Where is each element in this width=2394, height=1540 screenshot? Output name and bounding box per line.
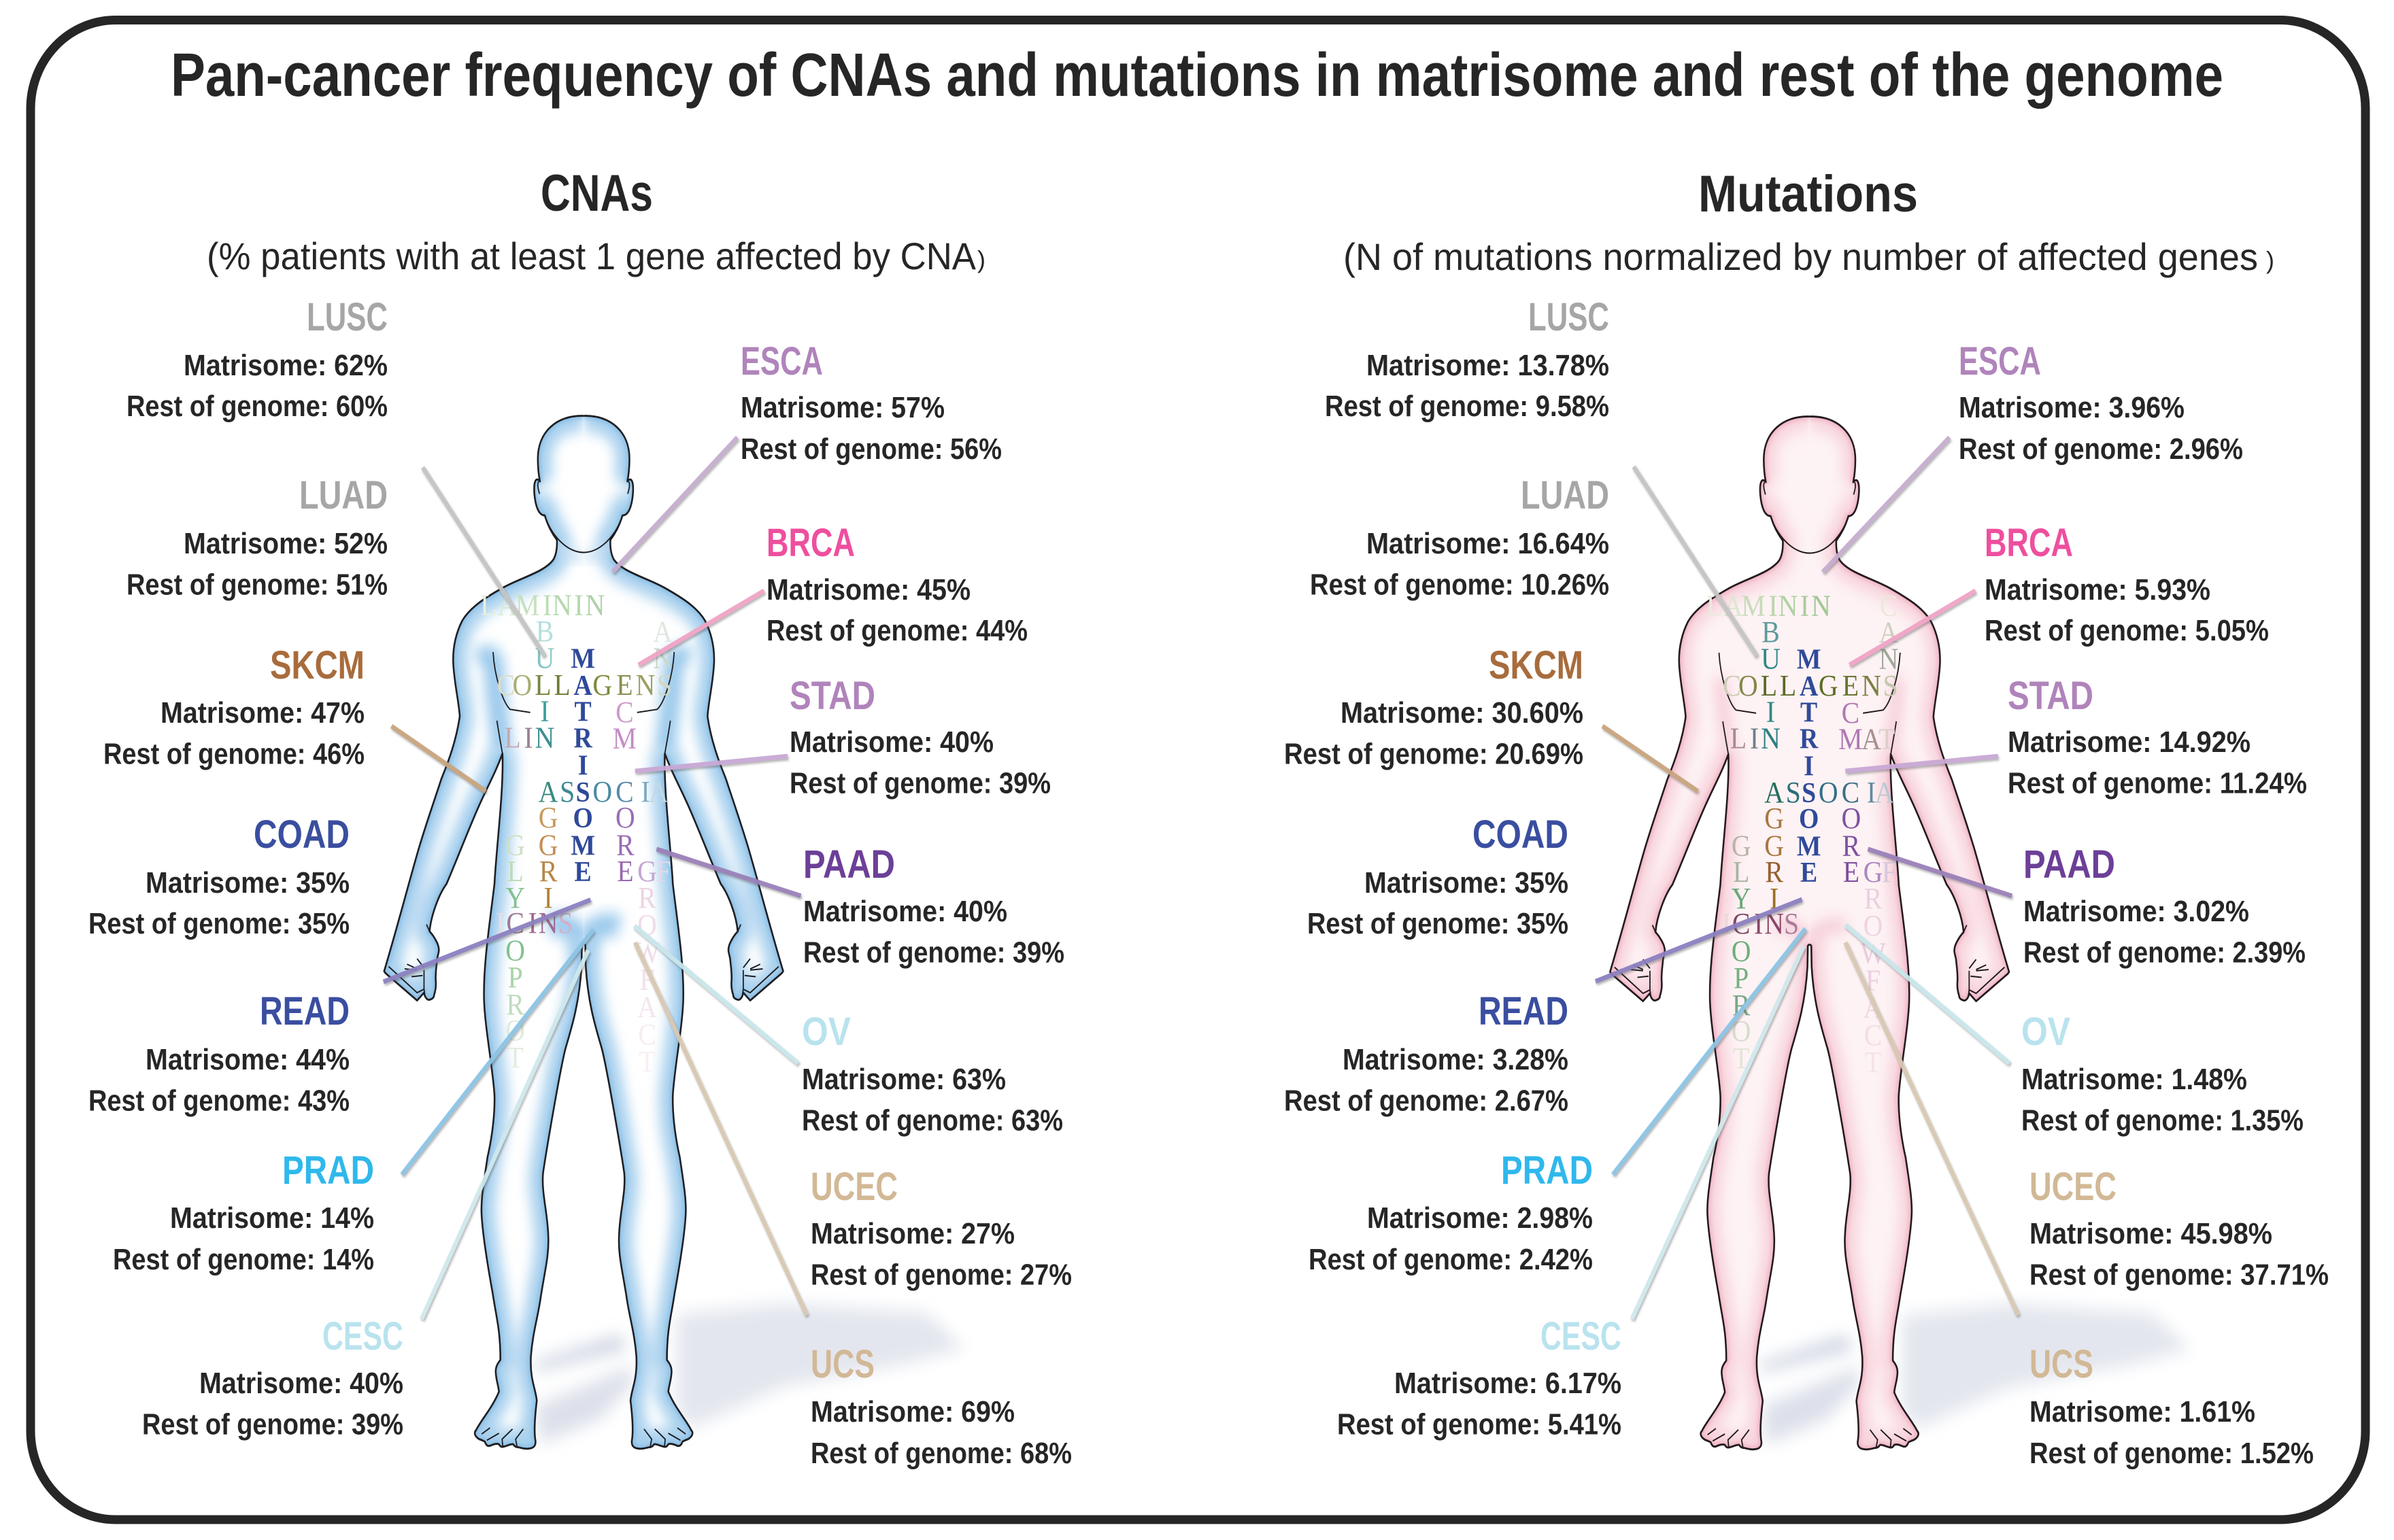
callout: PAAD: Rest of genome: 39% [803,936,1064,970]
word: CORE column: G [1864,855,1883,889]
callout: PAAD: PAAD [2023,842,2115,887]
callout: UCEC [811,1165,1072,1292]
callout: SKCM: SKCM [270,643,365,687]
word: LAMININ: L [1706,589,1723,623]
callout: BRCA [766,521,1028,647]
word: ECM MAT: M [1838,723,1863,756]
callout: COAD [88,812,350,940]
word: GROWTH FACTORS column: R [638,881,657,914]
word: ECM: M [613,722,637,755]
callout: BRCA: Matrisome: 5.93% [1985,573,2210,606]
word: MATRISOME: S [1802,776,1816,808]
word: CORE column: R [1842,829,1861,863]
callout: READ: READ [260,989,350,1033]
word: CORE column: E [617,855,634,888]
word: CINS: N [1764,907,1784,941]
callout: LUAD [1310,473,1609,601]
word: fibulin column: N [1761,721,1781,755]
leader lines [384,437,807,1319]
word: GLYCOPROTEINS column: L [507,855,524,888]
word: GROWTH FACTORS column: O [1864,909,1883,943]
word: fibulin column: B [536,615,554,648]
callout: LUSC [1325,295,1609,423]
word: CINS: I [1722,907,1731,941]
word: ASSOCIATED: I [1867,776,1876,809]
callout: CESC: CESC [1540,1314,1621,1358]
word: MATRISOME: A [574,669,592,702]
callout: LUAD: Rest of genome: 10.26% [1310,568,1609,601]
word: GROWTH FACTORS column: F [639,963,655,997]
word: MATRISOME: O [573,802,593,834]
word: AGGRIN column: I [543,881,553,914]
word: COLLAGENS: O [512,668,532,702]
word: fibulin column: N [535,721,554,755]
ground shadow [534,1303,964,1444]
callout: BRCA: Rest of genome: 5.05% [1985,614,2269,647]
callout: ESCA: ESCA [741,339,823,383]
word: MATRISOME: O [1799,802,1819,835]
word: LAMININ: N [1778,589,1798,623]
word letters [1706,589,1899,1080]
word: AGGRIN column: R [1765,855,1784,889]
callout: UCS: Rest of genome: 68% [811,1437,1072,1470]
callout: STAD: Rest of genome: 11.24% [2008,767,2307,800]
callout: READ [1284,989,1568,1118]
callout: UCS [2029,1342,2314,1470]
word: GROWTH FACTORS column: A [1864,991,1883,1025]
word: GLYCOPROTEINS column: O [505,934,525,968]
callout: LUSC: LUSC [307,295,388,339]
callout: COAD: Matrisome: 35% [146,866,350,900]
word: GLYCOPROTEINS column: P [1734,961,1749,995]
word: ASSOCIATED: I [641,775,650,808]
callout: UCEC: Matrisome: 27% [811,1217,1015,1250]
body outline [340,381,827,1513]
word: GLYCOPROTEINS column: O [505,1014,525,1048]
callout: PAAD [803,842,1064,970]
word: LAMININ: A [1723,589,1743,623]
word: ASSOCIATED: O [592,775,612,808]
callout: LUAD: Matrisome: 16.64% [1366,527,1609,560]
callout: READ: Rest of genome: 43% [88,1084,350,1118]
word: COLLAGENS: S [1883,669,1898,703]
callout: PRAD: Rest of genome: 14% [113,1243,374,1276]
word: ECM: C [616,696,634,730]
callouts: CNAs right column [741,339,1072,1470]
callout: OV: Matrisome: 63% [802,1063,1006,1096]
word: MATRISOME: M [1797,829,1821,862]
callout: STAD: Matrisome: 40% [790,725,994,759]
callout: LUAD: Rest of genome: 51% [127,568,388,601]
word: COLLAGENS: L [535,668,552,702]
word: ASSOCIATED: C [1842,776,1859,809]
word: ASSOCIATED: S [1786,776,1801,809]
word: CINS: S [1784,907,1799,941]
callout: BRCA: BRCA [766,521,855,565]
word: GLYCOPROTEINS column: T [507,1041,524,1075]
word: CORE column: O [616,801,635,835]
word: COLLAGENS: E [1842,669,1859,703]
callout: COAD: COAD [1472,812,1568,857]
word: CINS: I [528,906,537,940]
callout: STAD: STAD [2008,674,2093,718]
callout: CESC [142,1314,403,1441]
word: GROWTH FACTORS column: A [637,991,657,1024]
callout: CESC: Rest of genome: 39% [142,1407,403,1441]
word: fibulin column: I [1750,721,1759,755]
word: CAN column: N [1879,642,1898,676]
callout: STAD: STAD [790,674,875,718]
callout: OV [802,1010,1063,1137]
word: GLYCOPROTEINS column: Y [505,881,525,914]
callout: BRCA [1985,521,2269,647]
callout: ESCA: Matrisome: 57% [741,391,945,424]
word: CINS: N [539,906,558,940]
word: GROWTH FACTORS column: C [638,1018,656,1051]
callout: BRCA: BRCA [1985,521,2073,565]
callout: PRAD [113,1148,374,1276]
callout: UCS [811,1342,1072,1470]
word: CORE column: F [656,855,671,888]
callout: UCS: Matrisome: 69% [811,1395,1015,1428]
word: ASSOCIATED: C [616,775,634,808]
word: GLYCOPROTEINS column: G [1732,829,1751,863]
word: ECM MAT: C [1842,696,1859,730]
word: LAMININ: N [552,588,572,622]
word: COLLAGENS: C [497,668,515,702]
callout: UCEC: Rest of genome: 27% [811,1258,1072,1292]
callout: COAD: Matrisome: 35% [1364,866,1568,900]
callout: READ: Matrisome: 44% [146,1043,350,1076]
word: fibulin column: L [504,721,521,755]
subheading: CNAs: (% patients with at least 1 gene affected by CNA [207,235,977,277]
callout: UCS: UCS [2029,1342,2093,1386]
callout: SKCM: SKCM [1489,643,1583,687]
callout: PRAD: Rest of genome: 2.42% [1309,1243,1593,1276]
callout: BRCA: Matrisome: 45% [766,573,971,606]
callout: READ: Matrisome: 3.28% [1343,1043,1568,1076]
word: MATRISOME: S [576,776,590,808]
callout: ESCA: Rest of genome: 56% [741,432,1002,466]
word: MATRISOME: I [1804,750,1814,782]
word: LAMININ: I [543,588,552,622]
callout: CESC: Matrisome: 6.17% [1394,1367,1621,1400]
callout: PAAD: PAAD [803,842,895,887]
word: LAMININ: I [1800,589,1809,623]
word: MATRISOME: T [1800,696,1817,728]
word: AGGRIN column: R [539,855,558,888]
word: COLLAGENS: O [1738,669,1758,703]
callouts: Mutations right column [1959,339,2329,1470]
callout: PAAD: Matrisome: 40% [803,895,1007,928]
callout: LUSC: Rest of genome: 60% [127,390,388,423]
callout: UCS: UCS [811,1342,875,1386]
word: fibulin column: L [1730,721,1747,755]
callout: LUAD: Matrisome: 52% [184,527,388,560]
word: GROWTH FACTORS column: T [1865,1046,1881,1080]
word: GROWTH FACTORS column: W [635,936,660,970]
callout: OV: Matrisome: 1.48% [2021,1063,2247,1096]
word: GLYCOPROTEINS column: P [508,961,523,995]
word: LAMININ: N [1811,589,1831,623]
ground shadow [1760,1304,2191,1445]
callout: ESCA [741,339,1002,466]
callout: UCS: Rest of genome: 1.52% [2029,1437,2314,1470]
word: fibulin column: I [540,694,550,728]
word: ASSOCIATED: A [539,775,558,808]
word: MATRISOME: M [571,829,595,861]
word: GLYCOPROTEINS column: T [1733,1042,1749,1076]
heading: CNAs: CNAs [541,165,653,222]
panel: Mutations body figure [1566,381,2191,1513]
word: ECM MAT: T [1878,723,1895,756]
callout: SKCM: Rest of genome: 46% [103,737,365,771]
callout: PRAD: PRAD [1501,1148,1593,1193]
word: MATRISOME: R [574,722,593,754]
word: ANS column: A [653,615,673,649]
callout: OV [2021,1010,2304,1137]
word: GLYCOPROTEINS column: O [1732,934,1751,968]
word: MATRISOME: I [578,749,588,781]
word: MATRISOME: M [1797,643,1821,675]
word: COLLAGENS: G [1819,669,1838,703]
callout: UCEC: UCEC [811,1165,898,1209]
callout: COAD: Rest of genome: 35% [1307,907,1568,940]
callout: STAD [790,674,1051,800]
callout: ESCA: Matrisome: 3.96% [1959,391,2185,424]
word: GLYCOPROTEINS column: L [1733,855,1749,889]
word: ASSOCIATED: A [649,775,669,808]
word: GROWTH FACTORS column: O [637,908,657,942]
word: CAN column: A [1879,615,1899,649]
word: AGGRIN column: G [1764,829,1784,863]
word: GLYCOPROTEINS column: Y [1732,882,1751,915]
callout: READ: Rest of genome: 2.67% [1284,1084,1568,1118]
callout: LUAD [127,473,388,601]
word letters [480,588,673,1079]
word: COLLAGENS: L [1780,669,1796,703]
heading: Mutations: Mutations [1698,165,1918,223]
word: GLYCOPROTEINS column: O [1732,1014,1751,1048]
callout: LUSC: Matrisome: 62% [184,349,388,382]
callout: PRAD: Matrisome: 2.98% [1367,1201,1593,1235]
word: fibulin column: U [1761,642,1781,676]
word: CINS: I [1754,907,1763,941]
leader lines: Mutations [1596,437,2018,1319]
word: COLLAGENS: E [616,668,633,702]
callout: PAAD: Matrisome: 3.02% [2023,895,2249,928]
word: fibulin column: I [1766,695,1775,729]
callout: PRAD: PRAD [282,1148,374,1193]
callout: OV: Rest of genome: 63% [802,1104,1063,1137]
word: ANS column: N [653,641,673,675]
word: ASSOCIATED: A [1874,776,1895,809]
word: LAMININ: L [480,588,497,622]
word: LAMININ: M [516,588,539,622]
word: LAMININ: M [1741,589,1766,623]
word: LAMININ: I [574,588,584,622]
callout: OV: OV [802,1010,851,1054]
word: fibulin column: B [1761,615,1780,649]
word: LAMININ: N [586,588,605,622]
word: LAMININ: A [498,588,518,622]
word: ECM MAT: A [1861,723,1881,756]
callout: ESCA [1959,339,2243,466]
callout: CESC: Matrisome: 40% [199,1367,403,1400]
callout: OV: Rest of genome: 1.35% [2021,1104,2304,1137]
word: COLLAGENS: L [554,668,571,702]
word: AGGRIN column: G [1764,802,1784,836]
word: CORE column: G [637,855,657,888]
word: AGGRIN column: G [539,828,558,862]
word: ASSOCIATED: O [1819,776,1838,809]
word: GROWTH FACTORS column: R [1864,882,1883,915]
word: GLYCOPROTEINS column: R [1732,989,1751,1023]
panel: CNAs body figure [340,381,964,1513]
callout: UCS: Matrisome: 1.61% [2029,1395,2255,1428]
word: AGGRIN column: I [1770,882,1778,915]
callout: STAD: Matrisome: 14.92% [2008,725,2250,759]
word: GROWTH FACTORS column: F [1866,963,1881,997]
callouts: CNAs left column [88,295,403,1441]
callout: COAD [1307,812,1568,940]
callout: ESCA: Rest of genome: 2.96% [1959,432,2243,466]
word: LAMININ: I [1768,589,1778,623]
callout: LUSC: Rest of genome: 9.58% [1325,390,1609,423]
word: MATRISOME: M [571,642,595,674]
word: GROWTH FACTORS column: W [1860,936,1886,970]
callout: LUSC [127,295,388,423]
word: COLLAGENS: N [636,668,655,702]
word: CAN column: C [1880,589,1898,623]
callout: PRAD: Matrisome: 14% [170,1201,374,1235]
body outline [1566,381,2053,1513]
callout: ESCA: ESCA [1959,339,2041,383]
callout: LUAD: LUAD [299,473,388,517]
subheading: CNAs: ) [977,245,985,273]
callout: OV: OV [2021,1010,2070,1054]
word: COLLAGENS: G [592,668,612,702]
word: COLLAGENS: C [1723,669,1741,703]
word: ASSOCIATED: S [560,775,575,808]
callout: READ: READ [1479,989,1568,1033]
word: GROWTH FACTORS column: C [1864,1019,1882,1052]
callout: SKCM: Matrisome: 47% [161,696,365,730]
callout: SKCM [1284,643,1583,771]
word: GROWTH FACTORS column: T [639,1045,656,1079]
word: fibulin column: I [524,721,533,755]
word: MATRISOME: E [1800,856,1817,888]
word: CINS: S [558,906,573,940]
callout: STAD [2008,674,2307,800]
word: fibulin column: U [535,641,554,675]
word: CORE column: O [1842,802,1861,836]
callout: STAD: Rest of genome: 39% [790,767,1051,800]
callout: SKCM: Rest of genome: 20.69% [1284,737,1583,771]
word: COLLAGENS: S [657,668,672,702]
callout: UCEC [2029,1165,2329,1292]
callout: COAD: Rest of genome: 35% [88,907,350,940]
callout: PRAD [1309,1148,1593,1276]
callout: PAAD [2023,842,2306,970]
callout: PAAD: Rest of genome: 2.39% [2023,936,2306,970]
word: GLYCOPROTEINS column: R [506,988,525,1022]
subheading: Mutations: (N of mutations normalized by number of affected genes [1343,235,2258,278]
word: COLLAGENS: N [1861,669,1881,703]
callout: SKCM [103,643,365,771]
word: CORE column: E [1843,855,1859,889]
callout: LUAD: LUAD [1521,473,1609,517]
callout: UCEC: Matrisome: 45.98% [2029,1217,2272,1250]
callout: CESC: Rest of genome: 5.41% [1337,1407,1621,1441]
callout: CESC: CESC [322,1314,403,1358]
word: ASSOCIATED: A [1764,776,1784,809]
callout: UCEC: UCEC [2029,1165,2117,1209]
callouts: Mutations left column [1284,295,1621,1441]
word: GLYCOPROTEINS column: G [505,828,525,862]
callout: CESC [1337,1314,1621,1441]
callout: COAD: COAD [254,812,350,857]
callout: READ [88,989,350,1118]
word: MATRISOME: E [575,855,592,887]
callout: SKCM: Matrisome: 30.60% [1341,696,1583,730]
word: CINS: C [506,906,524,940]
word: MATRISOME: A [1800,670,1818,702]
subheading: Mutations: ) [2266,246,2274,274]
callout: BRCA: Rest of genome: 44% [766,614,1028,647]
word: CORE column: R [616,828,635,862]
callout: LUSC: LUSC [1528,295,1609,339]
callout: UCEC: Rest of genome: 37.71% [2029,1258,2329,1292]
word: CINS: C [1732,907,1750,941]
word: MATRISOME: R [1800,723,1819,755]
word: MATRISOME: T [575,695,592,728]
word: CINS: I [496,906,505,940]
word: AGGRIN column: G [539,801,558,835]
word: CORE column: F [1882,855,1897,889]
callout: LUSC: Matrisome: 13.78% [1366,349,1609,382]
word: COLLAGENS: L [1761,669,1777,703]
